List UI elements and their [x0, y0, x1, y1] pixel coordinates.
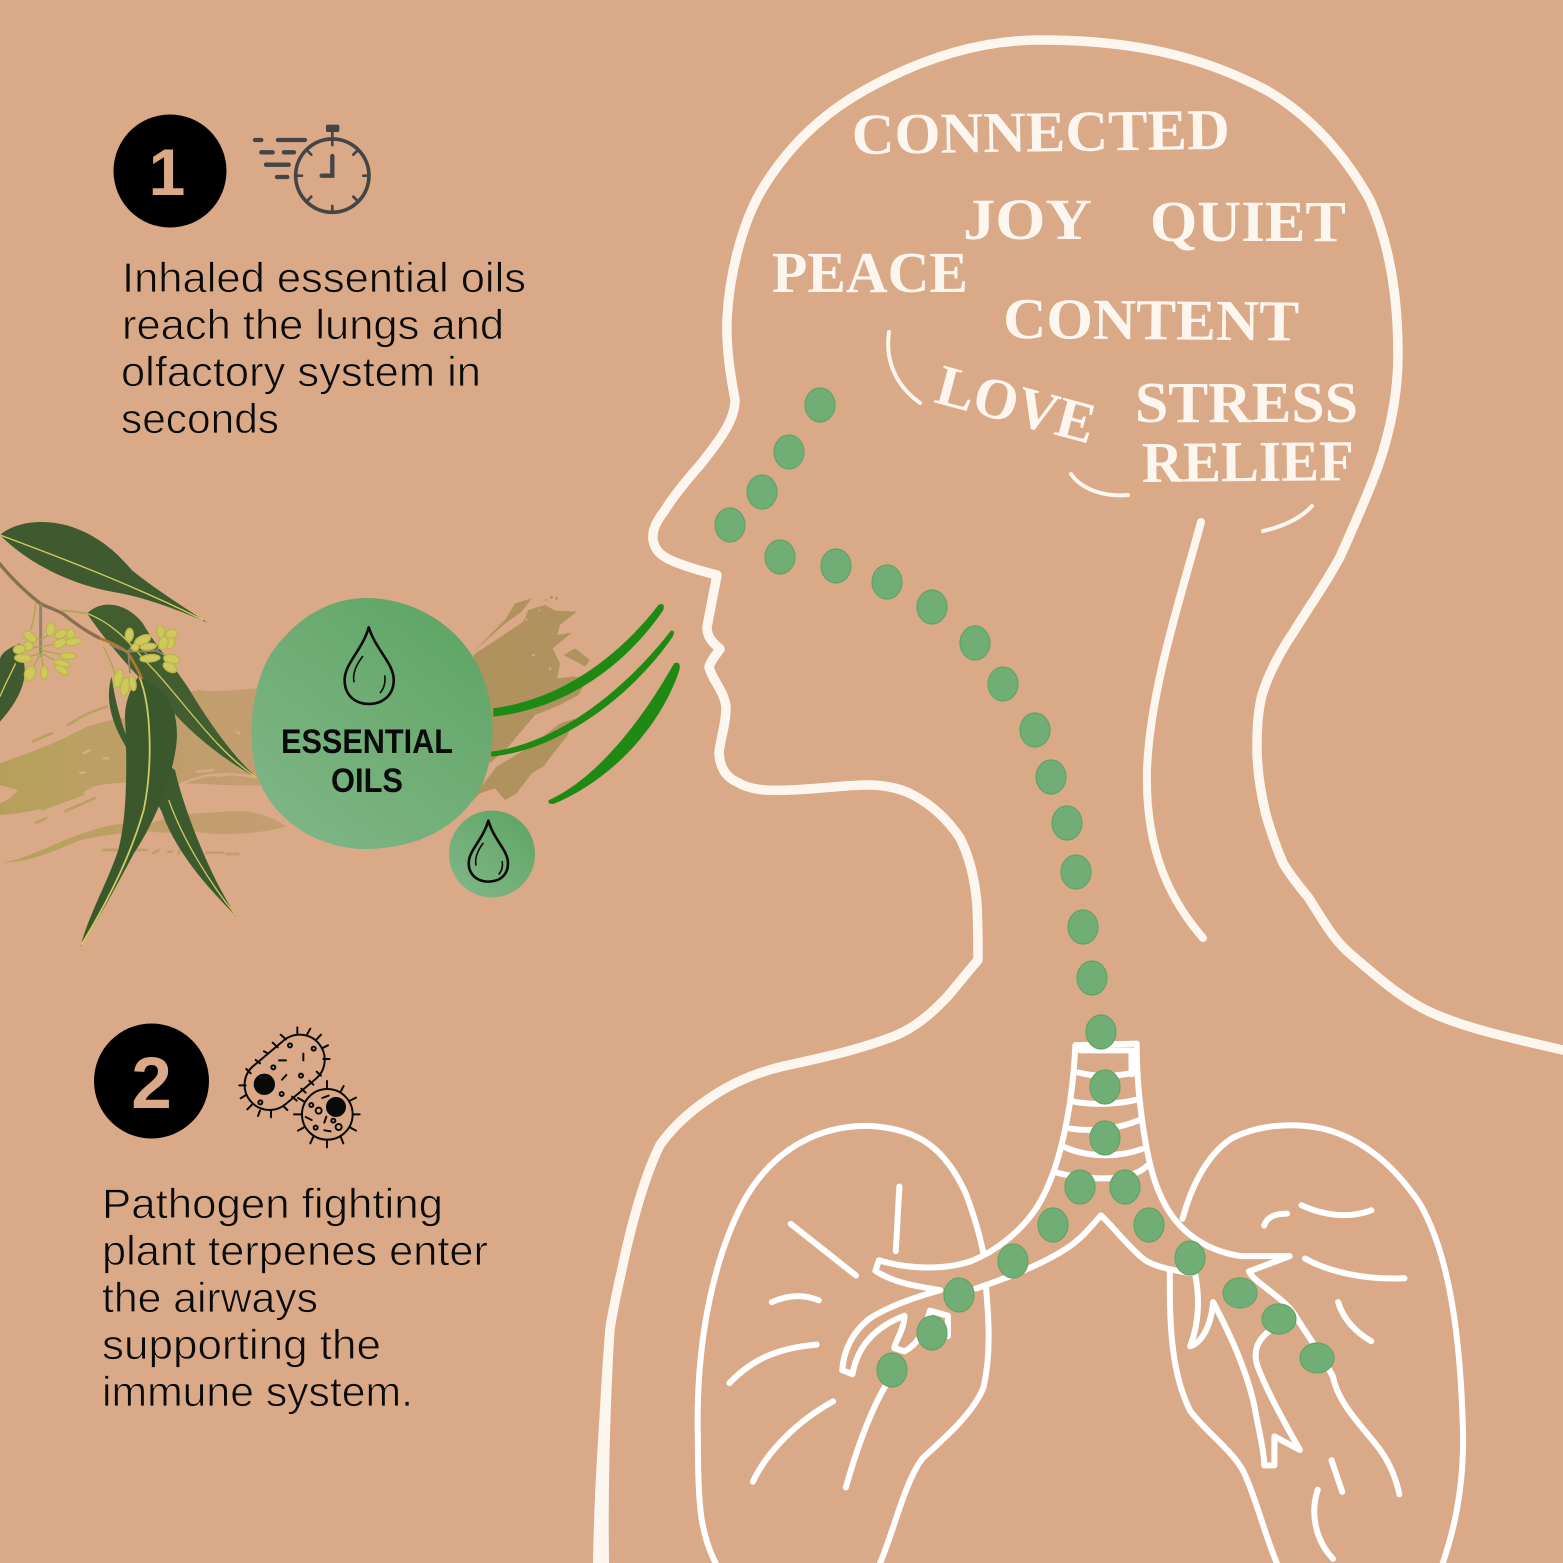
text: step 1: reach the lungs and	[122, 301, 504, 348]
emotion words: PEACE	[772, 240, 968, 305]
text: step 2: Pathogen fighting	[102, 1180, 443, 1227]
neck back line	[1147, 522, 1203, 938]
small oil drop badge	[449, 810, 535, 898]
lung detail strokes	[729, 1186, 1404, 1559]
emotion words: CONTENT	[1003, 286, 1299, 354]
eucalyptus branch	[0, 522, 258, 947]
text: step 1: olfactory system in	[121, 348, 481, 395]
trachea	[842, 1044, 1137, 1374]
emotion words: QUIET	[1150, 189, 1346, 254]
step 2 number badge: 2	[131, 1043, 172, 1124]
text: step 2: immune system.	[102, 1368, 413, 1415]
leaf: left fragment	[0, 643, 25, 722]
emotion words: LOVE	[930, 352, 1103, 456]
emotion words: STRESS	[1135, 370, 1358, 435]
head and shoulders outline	[593, 40, 1563, 1563]
brush stroke left	[0, 688, 287, 863]
text: step 2: supporting the	[102, 1321, 381, 1368]
essential oils badge: OILS	[331, 762, 403, 800]
essential oils badge	[251, 598, 493, 849]
step 2 number badge	[94, 1024, 209, 1138]
text: step 2	[102, 1180, 488, 1415]
text: step 1	[121, 254, 526, 442]
text: step 1: seconds	[121, 395, 279, 442]
emotion words: CONNECTED	[851, 97, 1230, 167]
stems and buds	[0, 563, 180, 697]
icon: stopwatch	[255, 125, 369, 212]
main bronchi	[976, 1215, 1190, 1288]
text: step 2: plant terpenes enter	[102, 1227, 488, 1274]
icon: pathogens	[234, 1024, 360, 1147]
left lung	[698, 1126, 984, 1563]
step 1 number badge: 1	[149, 135, 185, 209]
leaf: back long	[109, 677, 237, 917]
text: step 1: Inhaled essential oils	[122, 254, 526, 301]
label: ESSENTIAL	[281, 723, 453, 761]
right lung	[1183, 1125, 1463, 1563]
green dots: scent path	[715, 388, 1334, 1387]
lungs and trachea	[698, 1044, 1463, 1563]
emotion words	[772, 97, 1358, 495]
text: step 2: the airways	[102, 1274, 318, 1321]
scent wisps	[491, 604, 680, 804]
leaf: right	[87, 605, 258, 778]
icon: oil drop	[345, 627, 394, 704]
emotion words: JOY	[963, 187, 1092, 252]
leaf: top	[0, 522, 208, 623]
leaf: centre long	[80, 677, 177, 947]
brain arcs	[888, 332, 920, 403]
emotion words: RELIEF	[1142, 428, 1354, 495]
brush stroke right	[467, 596, 590, 807]
shoulder thick base	[593, 1340, 614, 1563]
step 1 number badge	[114, 114, 226, 228]
